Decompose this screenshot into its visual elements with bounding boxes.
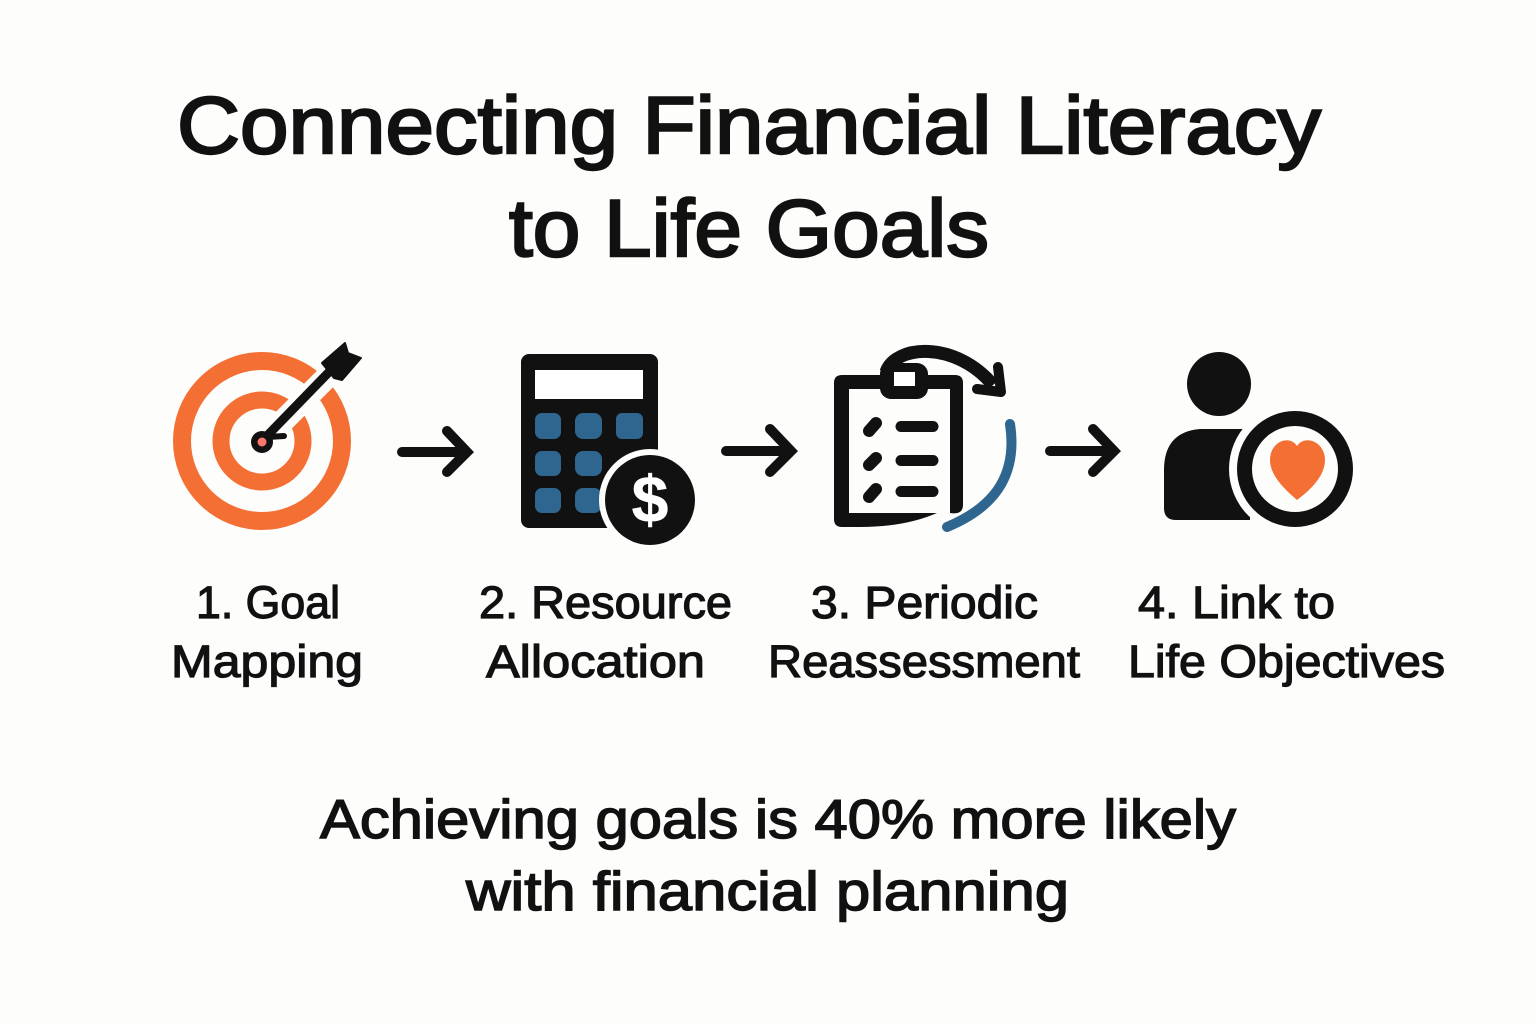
label: step 1 — [171, 577, 363, 687]
step labels — [171, 577, 1445, 687]
arrow 2 — [726, 429, 791, 472]
icon: person with heart — [1164, 352, 1361, 535]
label: step 1: 1. Goal — [196, 577, 340, 628]
label: step 2 — [479, 577, 732, 687]
label: step 4: Life Objectives — [1128, 636, 1445, 687]
arrow 3 — [1050, 429, 1114, 472]
icon: target with arrow — [182, 343, 361, 521]
title: Connecting Financial Literacy — [177, 81, 1322, 171]
icon: calculator with dollar badge — [521, 354, 701, 551]
callout statistic: with financial planning — [465, 860, 1069, 922]
callout statistic: Achieving goals is 40% more likely — [320, 788, 1237, 850]
icon: calculator with dollar badge: $ — [632, 462, 668, 536]
callout statistic — [320, 788, 1237, 922]
title: to Life Goals — [509, 184, 989, 274]
label: step 1: Mapping — [171, 636, 363, 687]
label: step 4: 4. Link to — [1138, 577, 1335, 628]
icon: clipboard with refresh arrow — [834, 351, 1011, 527]
label: step 2: 2. Resource — [479, 577, 732, 628]
label: step 3 — [768, 577, 1081, 687]
title — [177, 81, 1322, 274]
label: step 2: Allocation — [486, 636, 705, 687]
label: step 3: 3. Periodic — [811, 577, 1038, 628]
label: step 3: Reassessment — [768, 636, 1081, 687]
label: step 4 — [1128, 577, 1445, 687]
arrow 1 — [402, 431, 467, 472]
